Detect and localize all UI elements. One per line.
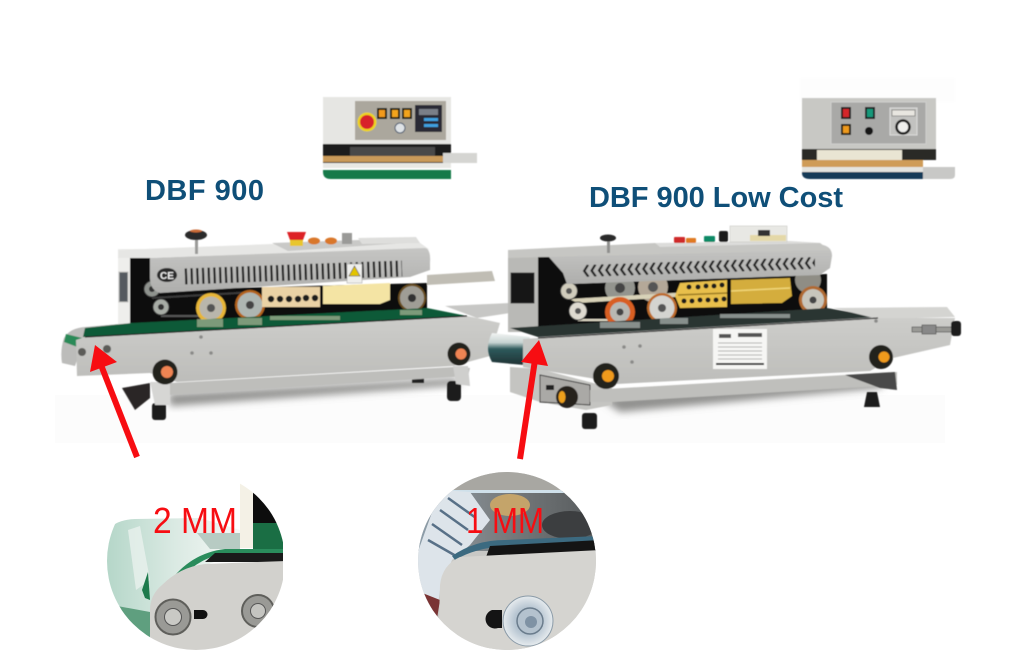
sealing head with vents [150,247,430,293]
CE badge [157,268,177,282]
machine: DBF 900 [61,230,510,420]
top plate [118,240,430,258]
orange knob left [593,363,619,389]
black backboard [130,256,427,324]
orange knob left [152,360,178,384]
extension plate [445,303,510,318]
side window [511,273,534,303]
top plate [508,243,830,258]
wheels and brass blocks [560,267,827,327]
sealing head [548,245,832,284]
controls and meter [655,226,822,247]
floor shadow [600,378,890,412]
glass conveyor belt [510,308,878,337]
arrow: left machine pointer [90,345,137,457]
vent slots [185,268,402,276]
floor shadow [168,378,462,406]
inset: DBF 900 Low Cost control panel [800,78,955,179]
orange knob right [869,345,893,369]
cabinet [118,249,152,325]
orange knob right [448,342,470,366]
side window [119,272,128,302]
belt reflections [600,314,790,328]
cabinet [508,250,540,332]
adjustment knob [600,234,616,253]
label: 2 MM: 2 MM [153,500,237,541]
detail circle: 1 MM [415,470,600,660]
heading: DBF 900 Low Cost: DBF 900 Low Cost [589,182,843,214]
green conveyor belt [83,308,467,337]
adjustment knob [185,230,207,254]
floor backdrop [55,395,945,443]
rating label [713,329,767,369]
extension plate [833,307,955,319]
legs and base frame [510,367,897,429]
detail circle: 2 MM [107,484,283,650]
inset: DBF 900 control panel [323,97,477,179]
label: 1 MM: 1 MM [466,500,544,541]
control plate and buttons [272,232,420,251]
heading: DBF 900: DBF 900 [145,175,264,207]
tension latch [912,321,961,336]
arrow: right machine pointer [520,340,548,459]
legs and base frame [122,366,470,420]
chevron vents [582,257,815,277]
side roller left end [61,323,132,366]
machine: DBF 900 Low Cost [488,226,961,429]
conveyor side panel [523,318,955,384]
black backboard [538,254,827,332]
warning label [347,264,362,283]
panel screws [78,335,213,356]
front roller [488,333,530,365]
right tray [427,271,495,285]
panel screws [622,319,878,364]
conveyor side panel [76,316,500,382]
heat blocks and wheels [144,281,425,323]
CE badge: CE [160,271,174,282]
belt reflections [197,310,422,327]
